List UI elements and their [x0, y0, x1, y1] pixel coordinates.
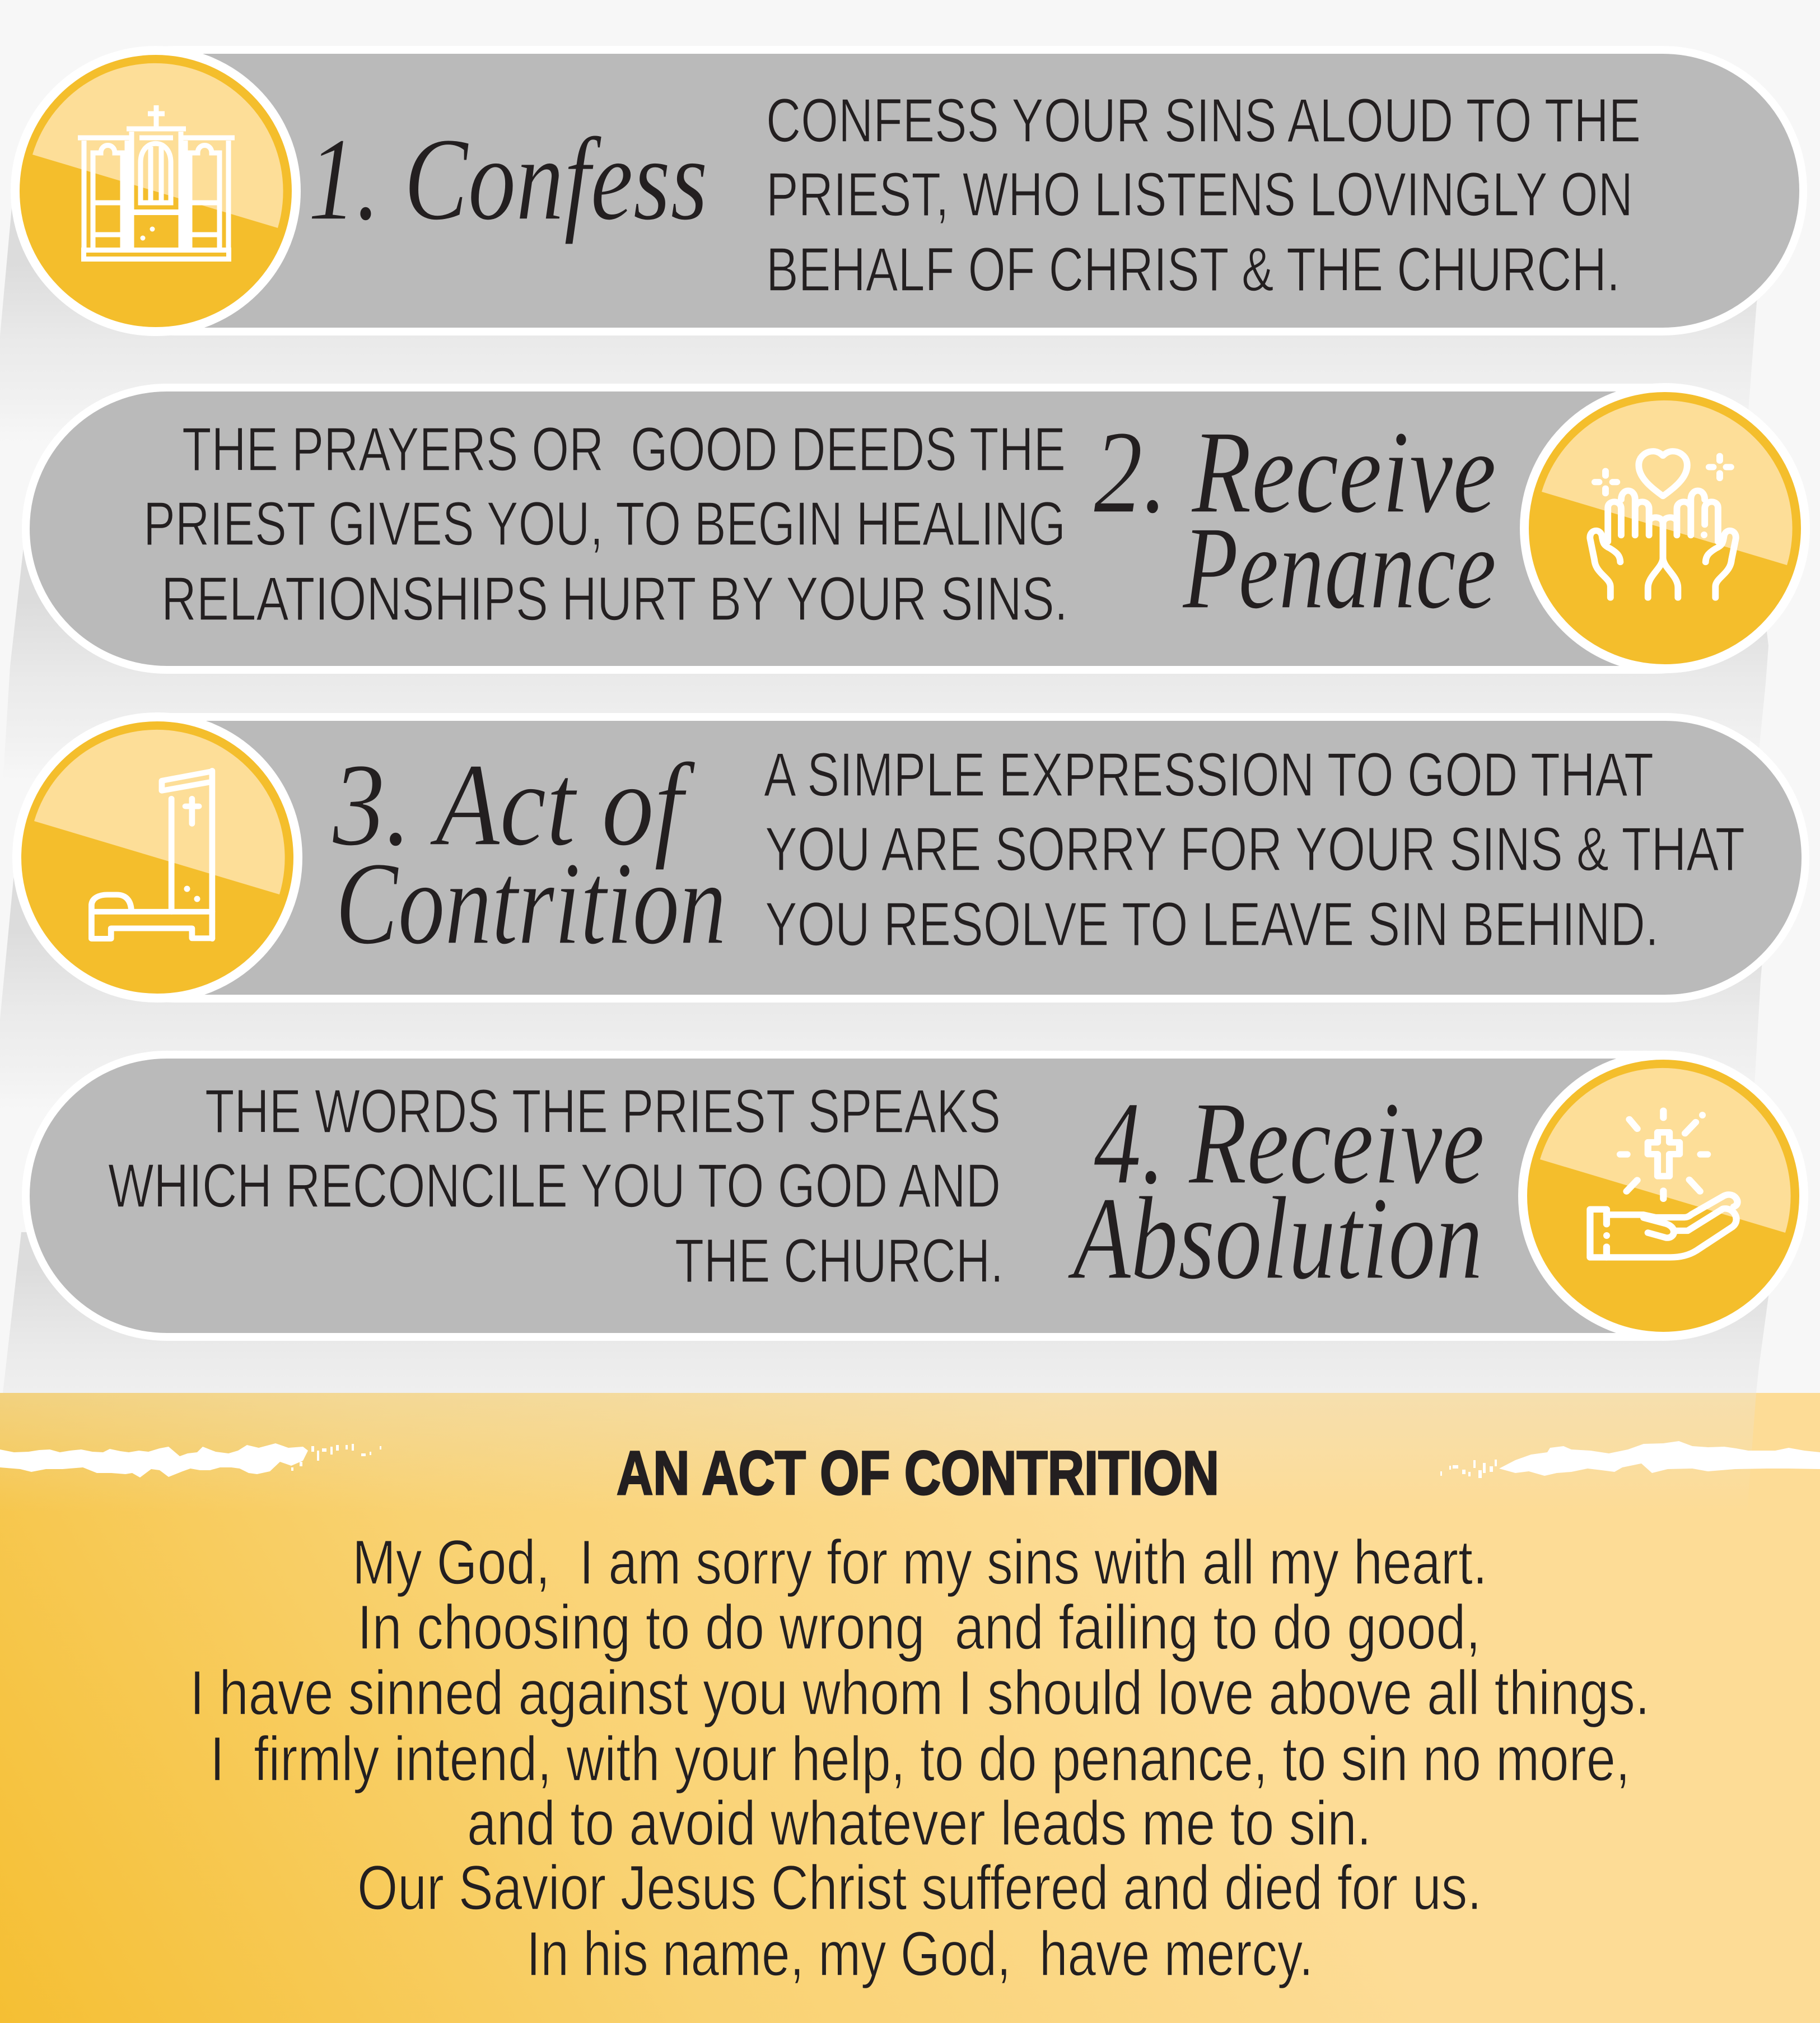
text block: penance description: PRIEST GIVES YOU, TO BEGIN HEALING: [143, 490, 1066, 558]
text block: absolution description: WHICH RECONCILE YOU TO GOD AND: [108, 1152, 1001, 1220]
text block: penance description: THE PRAYERS OR GOOD DEEDS THE: [182, 415, 1066, 484]
prayer text: and to avoid whatever leads me to sin.: [467, 1788, 1371, 1858]
heading: 4. Receive Absolution: 4. Receive: [1094, 1077, 1485, 1209]
torn paper stroke right: [1440, 1441, 1820, 1478]
text block: absolution description: [108, 1077, 1004, 1295]
icon: praying hands with heart: [1524, 388, 1805, 669]
prayer text: In his name, my God, have mercy.: [526, 1919, 1313, 1989]
text block: penance description: [143, 415, 1068, 633]
pill shadows: [0, 207, 1772, 1393]
pill background 1: [34, 50, 1803, 332]
heading: 4. Receive Absolution: [1067, 1077, 1485, 1304]
prayer text: [190, 1527, 1650, 1989]
panel: step 1 confess: [15, 50, 1803, 332]
heading: 4. Receive Absolution: Absolution: [1067, 1172, 1483, 1304]
text block: absolution description: THE WORDS THE PRIEST SPEAKS: [205, 1077, 1001, 1146]
heading: 3. Act of Contrition: [332, 739, 726, 969]
heading: 3. Act of Contrition: Contrition: [335, 837, 726, 969]
icon: confessional: [15, 50, 296, 332]
pill background 2: [26, 388, 1795, 670]
heading: 3. Act of Contrition: 3. Act of: [332, 739, 696, 870]
prayer text: My God, I am sorry for my sins with all my heart.: [352, 1527, 1487, 1597]
text block: penance description: RELATIONSHIPS HURT BY YOUR SINS.: [161, 565, 1068, 633]
panel: step 4 receive absolution: [26, 1055, 1804, 1337]
heading: 2. Receive Penance: 2. Receive: [1094, 406, 1496, 538]
panel: step 2 receive penance: [26, 388, 1805, 670]
pill background 4: [26, 1055, 1795, 1337]
panel: act of contrition prayer: [0, 1393, 1820, 2023]
panel: step 3 act of contrition: [17, 717, 1805, 999]
title: AN ACT OF CONTRITION: [617, 1439, 1219, 1508]
panel background: [0, 1393, 1820, 2023]
text block: confess description: BEHALF OF CHRIST & THE CHURCH.: [766, 235, 1620, 304]
icon: kneeler: [17, 717, 298, 998]
text block: absolution description: THE CHURCH.: [675, 1227, 1004, 1295]
prayer text: Our Savior Jesus Christ suffered and died for us.: [357, 1853, 1482, 1923]
heading: 1. Confess: 1. Confess: [308, 113, 708, 245]
heading: 2. Receive Penance: [1094, 406, 1496, 633]
heading: 2. Receive Penance: Penance: [1182, 502, 1496, 633]
text block: confess description: [766, 86, 1641, 304]
icon: hand with cross: [1523, 1055, 1804, 1336]
pill background 3: [34, 717, 1805, 999]
text block: contrition description: [764, 740, 1745, 959]
prayer text: In choosing to do wrong and failing to do good,: [357, 1592, 1481, 1662]
torn paper stroke left: [0, 1443, 381, 1477]
